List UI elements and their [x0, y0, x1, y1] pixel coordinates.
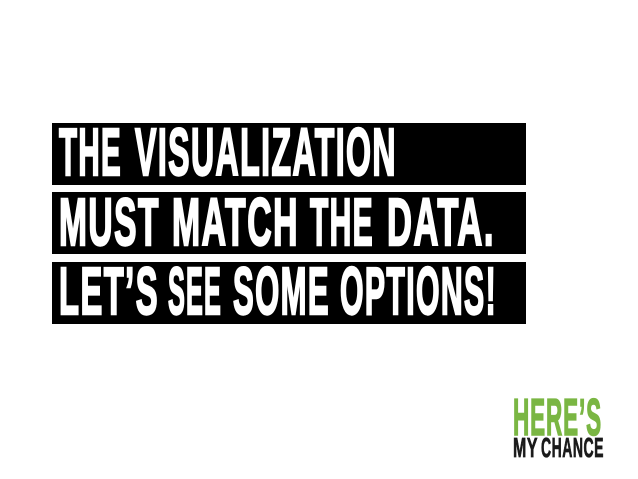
- logo words: MY CHANCE: MY: [513, 432, 538, 463]
- headline line 1: THE: [59, 115, 122, 190]
- headline line 3: SOME: [233, 254, 330, 329]
- headline line 3: [52, 254, 526, 329]
- logo: Here's My Chance: [513, 389, 604, 463]
- headline block: [52, 115, 526, 329]
- headline line 2: [52, 185, 526, 260]
- logo words: MY CHANCE: [513, 432, 604, 463]
- headline line 2: MATCH: [172, 185, 299, 260]
- headline line 1: [52, 115, 526, 190]
- headline line 2: THE: [310, 185, 374, 260]
- headline line 2: DATA.: [387, 185, 495, 260]
- headline line 3: SEE: [168, 254, 222, 329]
- headline line 3: LET’S: [59, 254, 159, 329]
- headline line 2: MUST: [59, 185, 160, 260]
